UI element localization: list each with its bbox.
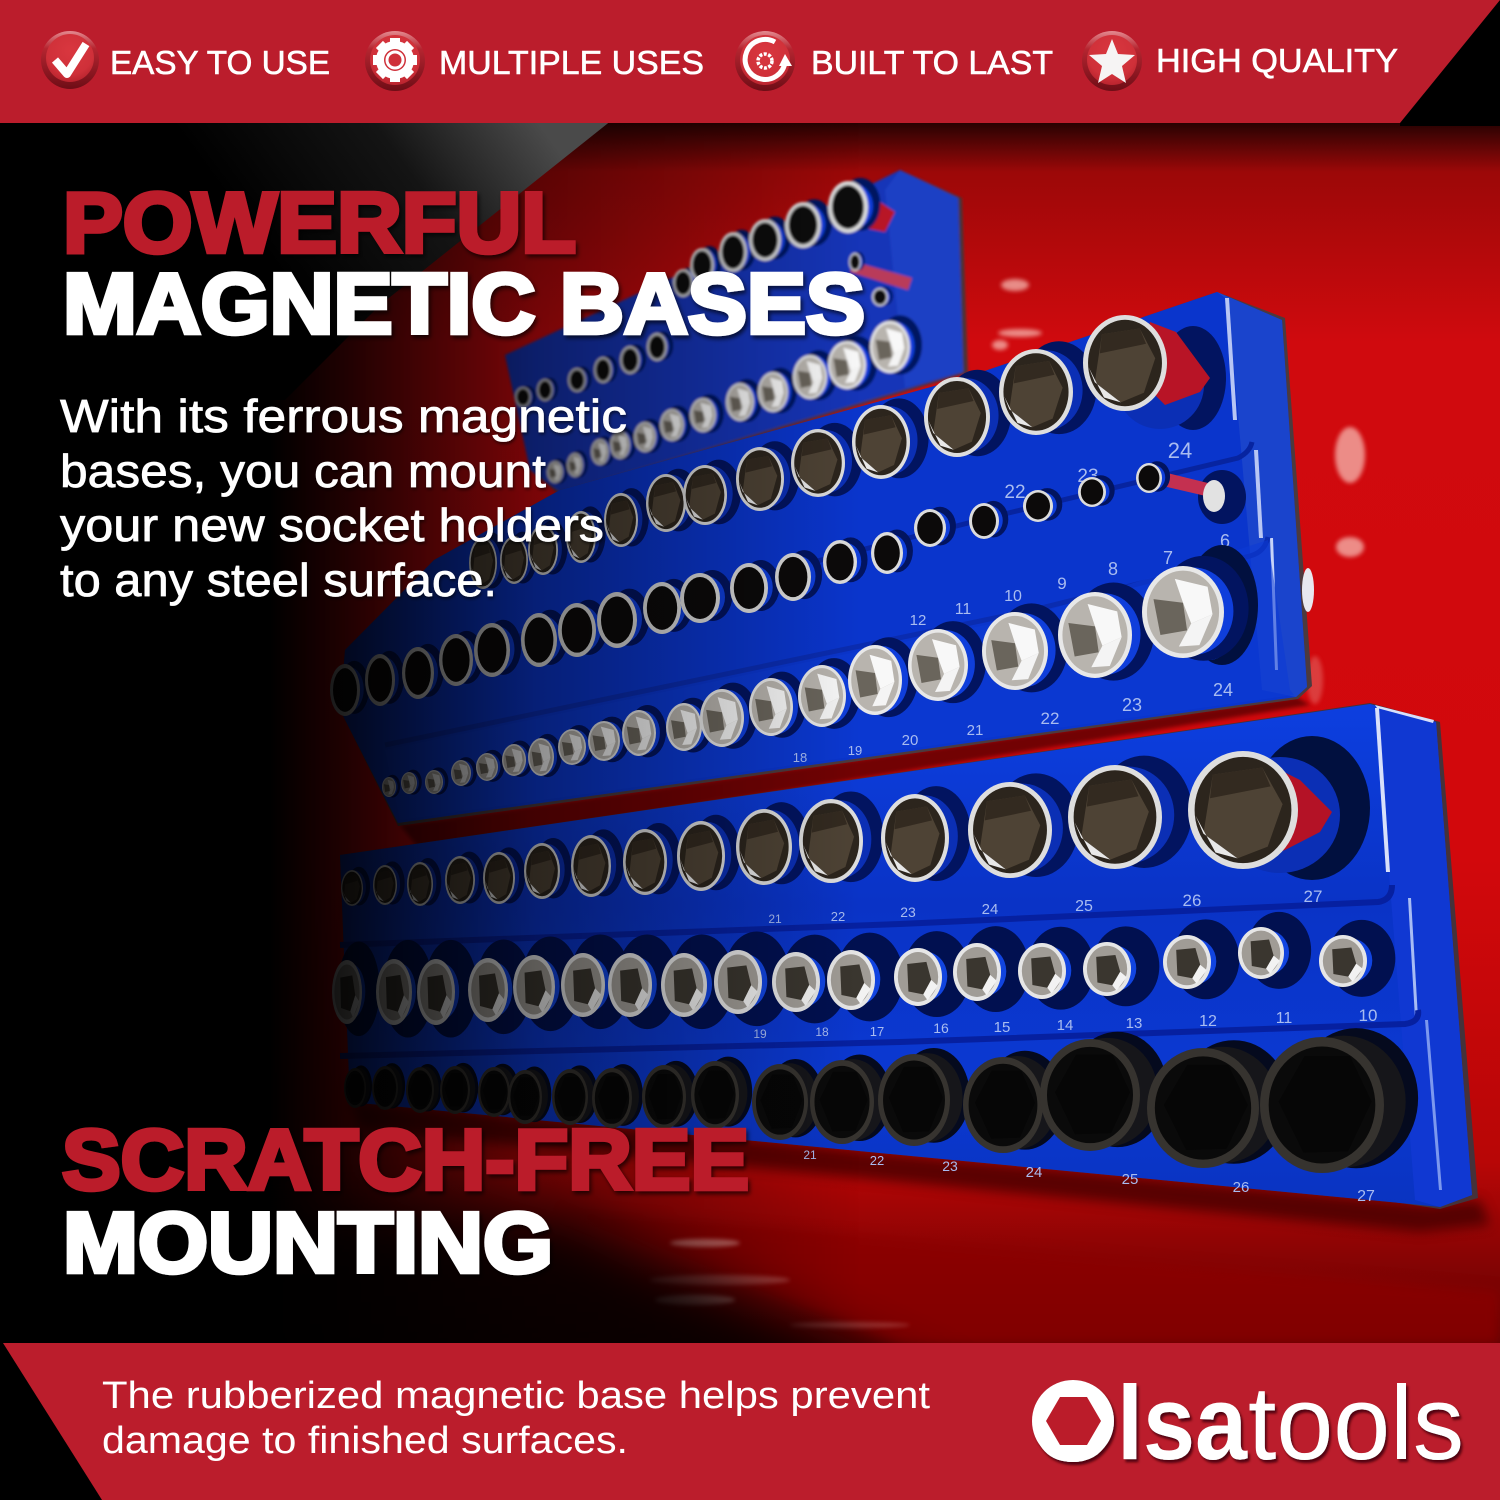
heading: scratch-free mounting (62, 1113, 749, 1291)
tray numbers: 16 (933, 1020, 949, 1036)
tray numbers: 26 (1183, 891, 1201, 910)
tray numbers: 20 (902, 732, 918, 749)
tray numbers: 21 (967, 722, 983, 739)
tray body (340, 703, 1478, 1209)
tray numbers: 7 (1163, 548, 1173, 568)
label: MULTIPLE USES (439, 45, 704, 82)
row 1 sockets (341, 736, 1370, 906)
body text: magnetic bases: With its ferrous magnetic (60, 390, 627, 442)
body text: magnetic bases: bases, you can mount (60, 445, 546, 497)
tray numbers: 25 (1122, 1171, 1138, 1188)
heading: powerful magnetic bases (63, 176, 865, 352)
back tray (blurred) (505, 170, 968, 495)
tray numbers: 23 (900, 904, 916, 920)
top banner (0, 0, 1500, 126)
tray numbers: 23 (942, 1158, 958, 1174)
icon: checkmark badge (41, 31, 99, 89)
body text: magnetic bases: your new socket holders (60, 499, 604, 551)
magnet edge highlight (1302, 568, 1314, 612)
tray numbers: 24 (982, 901, 998, 918)
icon: star badge (1082, 31, 1142, 91)
body text: magnetic bases: to any steel surface. (60, 554, 497, 606)
icon: gear badge (365, 31, 425, 91)
built to last (735, 31, 1053, 91)
cabinet streak (650, 1239, 910, 1328)
bottom banner (0, 1343, 1500, 1500)
tray numbers: 27 (1304, 887, 1322, 906)
shadow under middle tray (400, 697, 1310, 850)
tray body (340, 292, 1312, 826)
row 1 sockets (469, 315, 1226, 589)
tray numbers: 22 (870, 1153, 884, 1168)
tray numbers: 19 (753, 1027, 767, 1041)
tray numbers: 24 (1026, 1164, 1042, 1181)
tray numbers: 12 (910, 612, 926, 629)
label: HIGH QUALITY (1156, 43, 1398, 80)
tray numbers: 10 (1359, 1006, 1377, 1025)
tray numbers: 11 (1276, 1010, 1292, 1027)
row divider lines (340, 885, 1392, 945)
tray numbers: 22 (1041, 709, 1059, 728)
tray numbers: 23 (1077, 466, 1099, 487)
tray numbers: 21 (768, 912, 782, 926)
tray numbers: 14 (1057, 1017, 1073, 1034)
caption text (102, 1375, 930, 1462)
middle tray (330, 292, 1314, 826)
cabinet lower edge (560, 1210, 1500, 1345)
tray numbers: 18 (793, 750, 807, 765)
tray numbers: 26 (1233, 1179, 1249, 1196)
tray numbers: 25 (1075, 898, 1093, 915)
reflections on chest (992, 279, 1365, 704)
icon: arrow gear badge (735, 31, 795, 91)
tray numbers: 13 (1126, 1015, 1142, 1032)
dark vignette bottom (200, 1215, 960, 1400)
tray numbers: 15 (994, 1019, 1010, 1036)
tray numbers (793, 438, 1233, 765)
tray numbers: 10 (1004, 588, 1022, 605)
row divider lines (345, 442, 1252, 680)
body text: magnetic bases (60, 390, 627, 606)
tray numbers (753, 887, 1377, 1205)
easy to use (41, 31, 330, 89)
tray numbers: 6 (1220, 531, 1230, 551)
grey wedge top left (0, 120, 612, 400)
tray numbers: 9 (1057, 574, 1067, 593)
logo: Olsatools: O (1030, 1360, 1116, 1485)
label: BUILT TO LAST (811, 45, 1053, 82)
bottom tray (332, 703, 1478, 1209)
tray numbers: 22 (1004, 482, 1026, 503)
label: EASY TO USE (110, 45, 330, 82)
logo: Olsatools: lsa (1117, 1365, 1248, 1482)
tray numbers: 21 (803, 1148, 817, 1162)
caption text: damage to finished surfaces. (102, 1420, 628, 1462)
tray numbers: 18 (815, 1025, 829, 1039)
logo: Olsatools (1030, 1360, 1464, 1485)
caption text: The rubberized magnetic base helps prevent (102, 1375, 930, 1417)
row 3 sockets (382, 545, 1258, 798)
heading: scratch-free mounting: SCRATCH-FREE (62, 1113, 749, 1208)
tray numbers: 27 (1357, 1188, 1375, 1205)
tray numbers: 24 (1168, 438, 1192, 463)
row 2 sockets (332, 912, 1395, 1038)
shadow under bottom tray (350, 1100, 1490, 1232)
row 3 impact sockets (344, 1028, 1418, 1173)
heading: powerful magnetic bases: MAGNETIC BASES (63, 257, 865, 352)
multiple uses (365, 31, 704, 91)
tray numbers: 11 (955, 601, 971, 618)
heading: powerful magnetic bases: POWERFUL (63, 176, 576, 271)
tray numbers: 17 (870, 1024, 884, 1039)
tray numbers: 12 (1199, 1013, 1217, 1030)
heading: scratch-free mounting: MOUNTING (63, 1196, 553, 1291)
tray numbers: 19 (848, 743, 862, 758)
tray numbers: 23 (1122, 695, 1142, 715)
tray numbers: 22 (831, 909, 845, 924)
dark vignette left (0, 120, 860, 1350)
row 2 sockets (330, 461, 1246, 716)
tray numbers: 8 (1108, 559, 1118, 579)
tray numbers: 24 (1213, 680, 1233, 700)
high quality (1082, 31, 1398, 91)
logo: Olsatools: tools (1248, 1365, 1464, 1482)
